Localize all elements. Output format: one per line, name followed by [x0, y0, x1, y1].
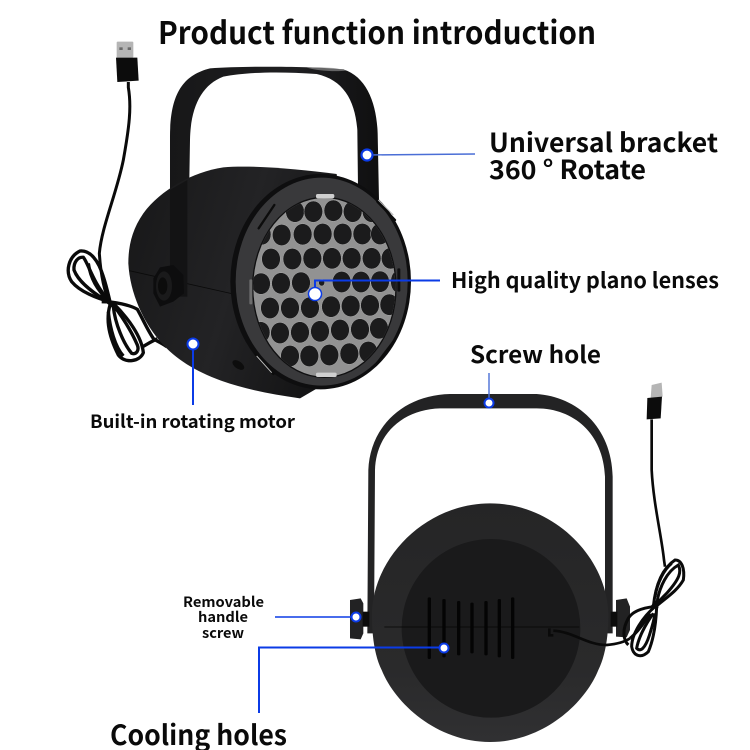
callout: plano lenses	[308, 264, 719, 300]
callout: screw hole: Screw hole	[470, 336, 601, 370]
callout: screw hole	[470, 336, 601, 408]
callout: universal bracket: 360 ° Rotate	[489, 150, 646, 187]
callout: removable handle screw: screw	[202, 623, 244, 643]
bracket	[367, 394, 613, 633]
usb cable	[68, 42, 167, 361]
lens face	[230, 174, 411, 389]
callout: rotating motor	[90, 338, 295, 434]
callout: universal bracket: Universal bracket	[489, 123, 718, 160]
ring slots	[249, 194, 400, 377]
callout: removable handle screw	[183, 592, 360, 643]
bracket	[170, 67, 379, 297]
rear panel	[402, 539, 580, 718]
callout: cooling holes	[110, 644, 448, 750]
callout: removable handle screw: handle	[198, 607, 248, 627]
callout: removable handle screw: Removable	[183, 592, 264, 612]
side knobs	[350, 598, 630, 639]
product: front view lamp	[68, 42, 411, 398]
callout: universal bracket	[362, 123, 718, 187]
callout: rotating motor: Built-in rotating motor	[90, 408, 295, 434]
lamp body	[372, 503, 608, 742]
product: back view lamp	[350, 383, 684, 742]
callout: plano lenses: High quality plano lenses	[451, 264, 719, 295]
cooling slits	[428, 597, 514, 659]
usb cable	[549, 383, 684, 656]
lamp body	[128, 167, 360, 398]
title: Product function introduction	[158, 8, 596, 53]
lens grid	[253, 198, 396, 376]
mounting knob	[153, 265, 184, 307]
